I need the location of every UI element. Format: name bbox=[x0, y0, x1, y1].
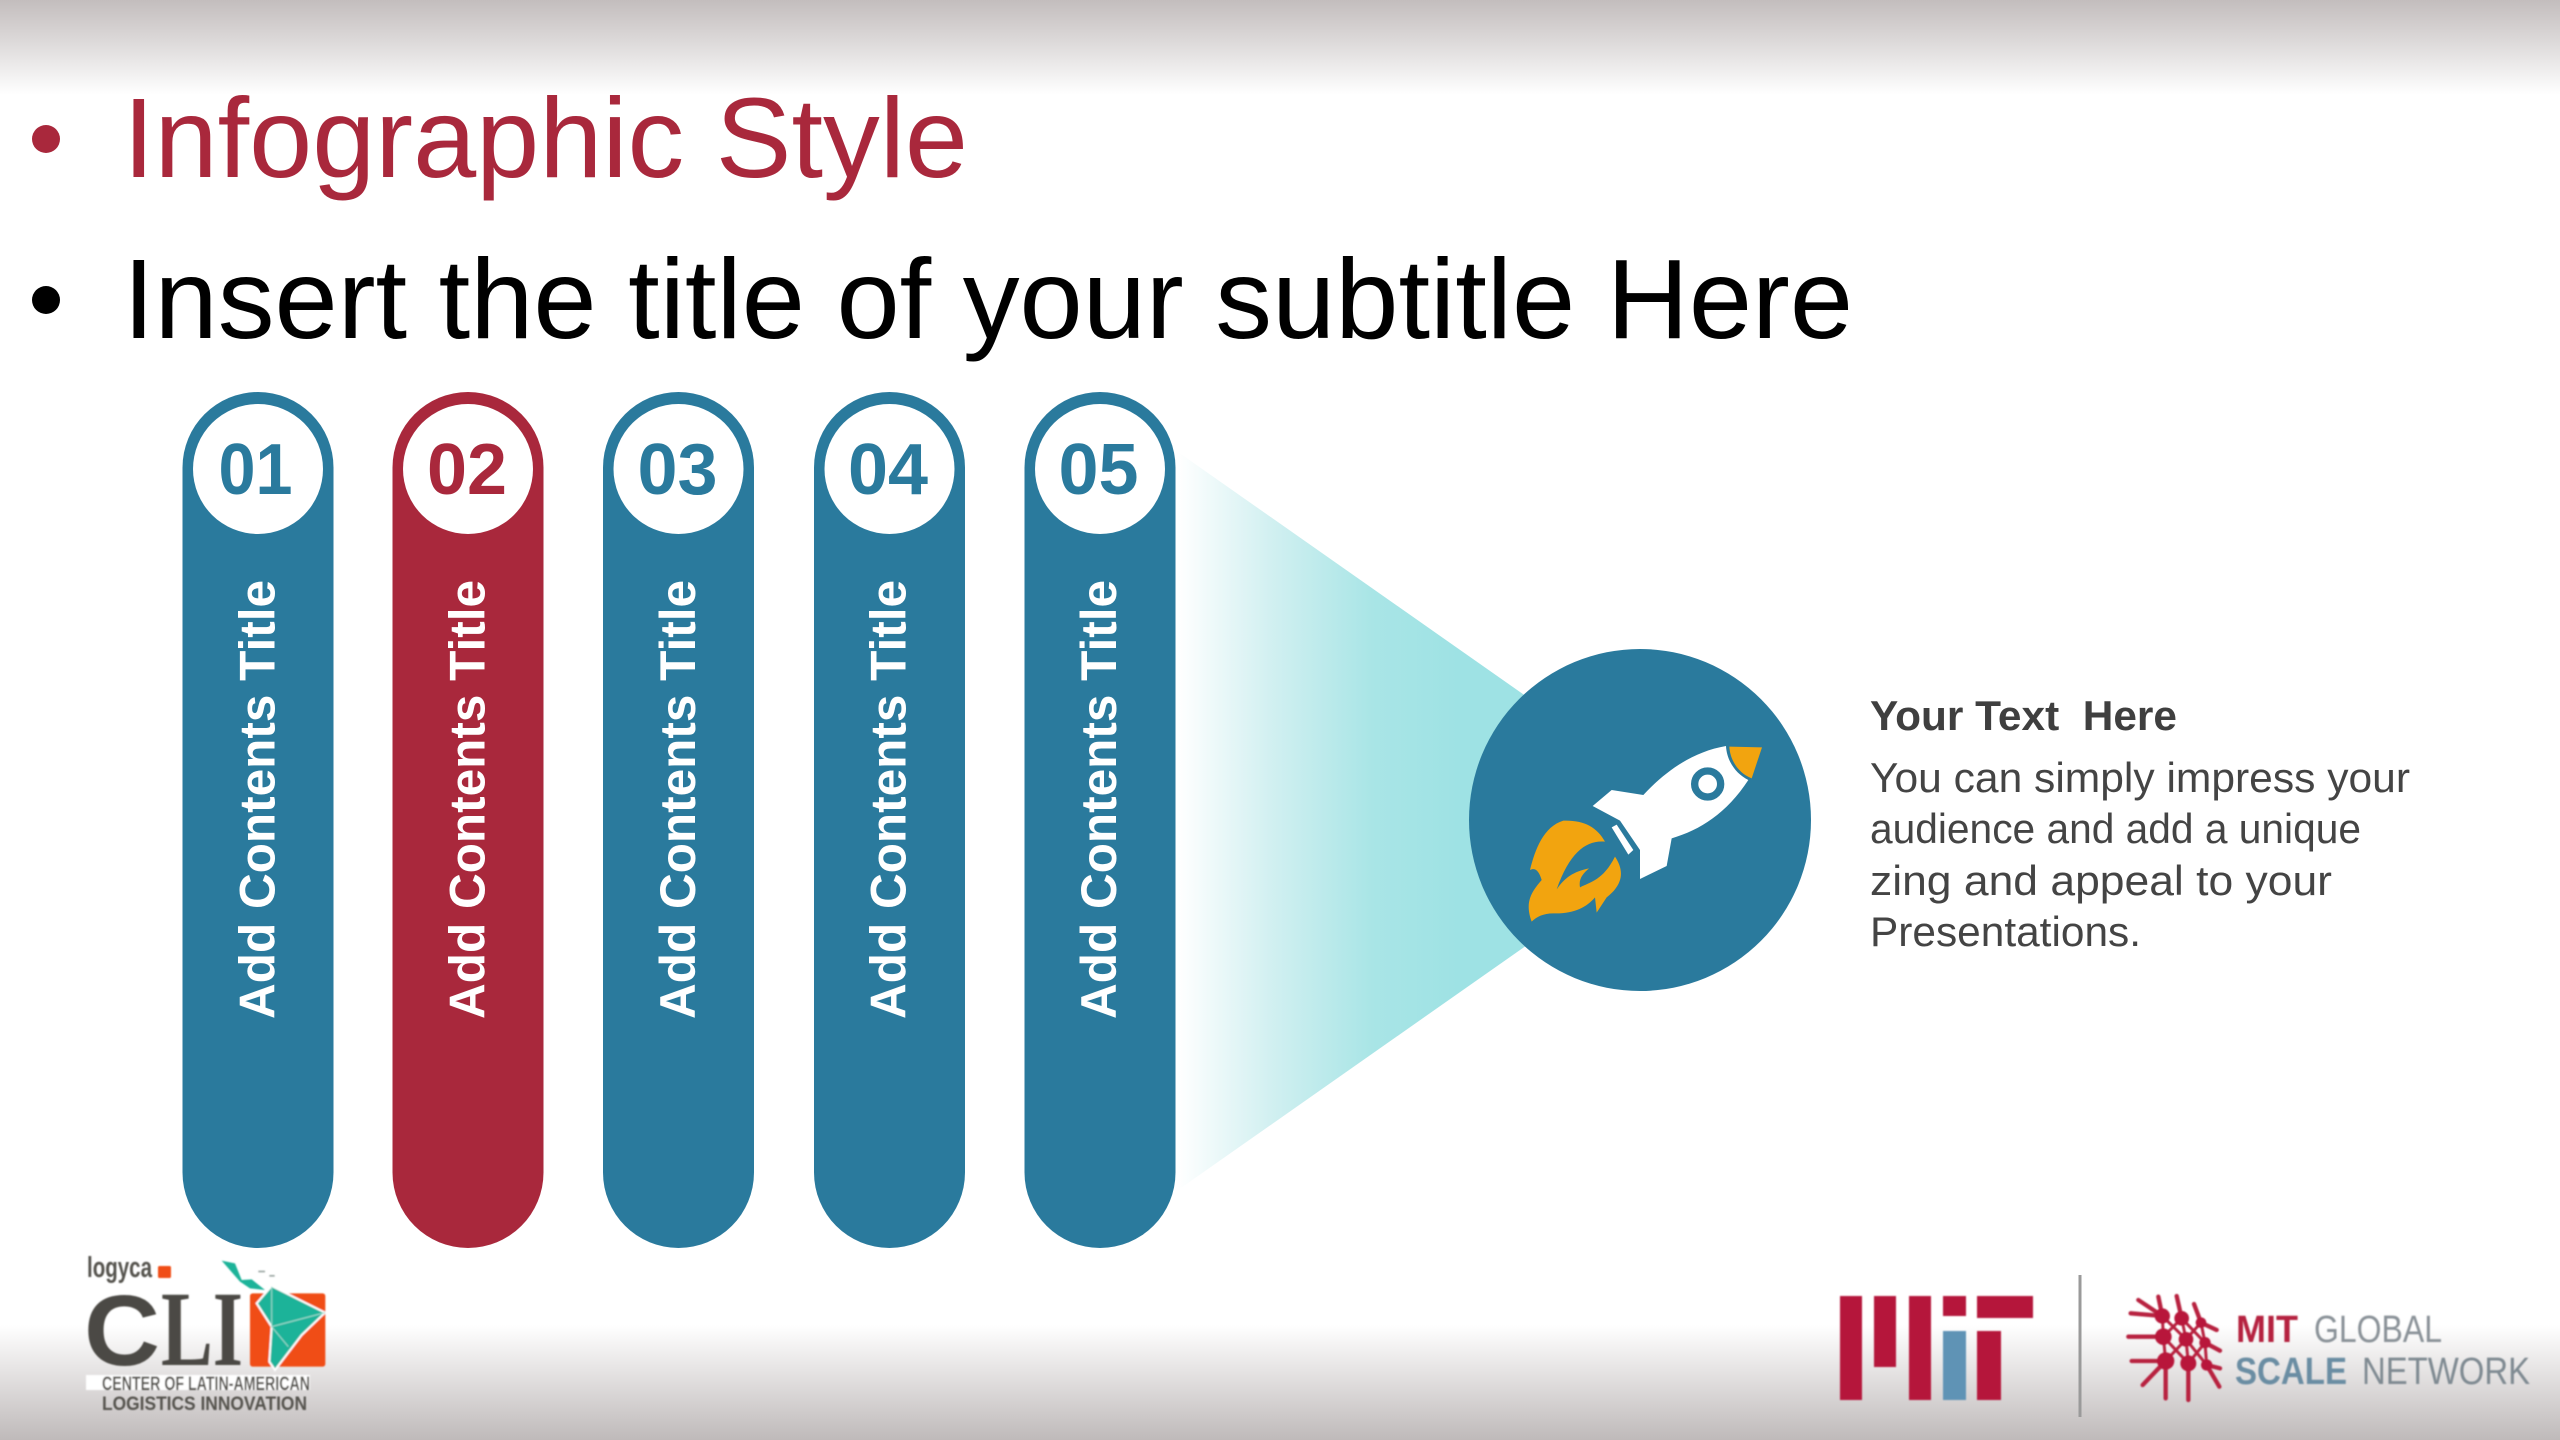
pill 01: 01 bbox=[218, 430, 292, 510]
logo: CLI: logyca bbox=[87, 1252, 153, 1284]
subtitle: Insert the title of your subtitle Here bbox=[123, 236, 1853, 362]
pill 04: Add Contents Title bbox=[860, 580, 916, 1019]
logo: MIT Global Scale Network bbox=[2128, 1296, 2530, 1400]
text block: zing and appeal to your bbox=[1870, 857, 2332, 904]
pill 03: 03 bbox=[638, 430, 718, 510]
icon: rocket in circle bbox=[1469, 649, 1811, 991]
text block: Presentations. bbox=[1870, 908, 2141, 955]
logo: CLI: CENTER OF LATIN-AMERICAN bbox=[102, 1374, 310, 1395]
pill 01 bbox=[182, 392, 334, 1248]
text block: You can simply impress your bbox=[1870, 754, 2410, 801]
logo: MIT Global Scale Network: NETWORK bbox=[2362, 1351, 2530, 1393]
logo: CLI: LOGISTICS INNOVATION bbox=[102, 1394, 307, 1415]
pill 02: 02 bbox=[427, 430, 507, 510]
logo: MIT Global Scale Network: SCALE bbox=[2235, 1351, 2347, 1393]
logo: MIT bbox=[1840, 1296, 2033, 1400]
logo: CLI bbox=[84, 1252, 325, 1415]
pill 04 bbox=[814, 392, 965, 1248]
title: Infographic Style bbox=[123, 75, 968, 201]
pill 05 bbox=[1024, 392, 1176, 1248]
text block: audience and add a unique bbox=[1870, 805, 2361, 852]
text block: Your Text Here bbox=[1870, 692, 2177, 739]
text block bbox=[1870, 692, 2410, 955]
light beam from pills to circle bbox=[1178, 452, 1530, 1190]
pill 02 bbox=[392, 392, 544, 1248]
pill 01: Add Contents Title bbox=[230, 580, 286, 1019]
pill 05: 05 bbox=[1058, 430, 1138, 510]
pill 05: Add Contents Title bbox=[1071, 580, 1127, 1019]
logo: MIT Global Scale Network: GLOBAL bbox=[2314, 1309, 2442, 1351]
pill 03 bbox=[603, 392, 754, 1248]
pill 03: Add Contents Title bbox=[650, 580, 706, 1019]
logo: CLI: LI bbox=[161, 1271, 243, 1389]
pill 04: 04 bbox=[848, 430, 928, 510]
pill 02: Add Contents Title bbox=[440, 580, 496, 1019]
logo: MIT Global Scale Network: MIT bbox=[2236, 1309, 2298, 1351]
logo: CLI: C bbox=[84, 1275, 160, 1387]
